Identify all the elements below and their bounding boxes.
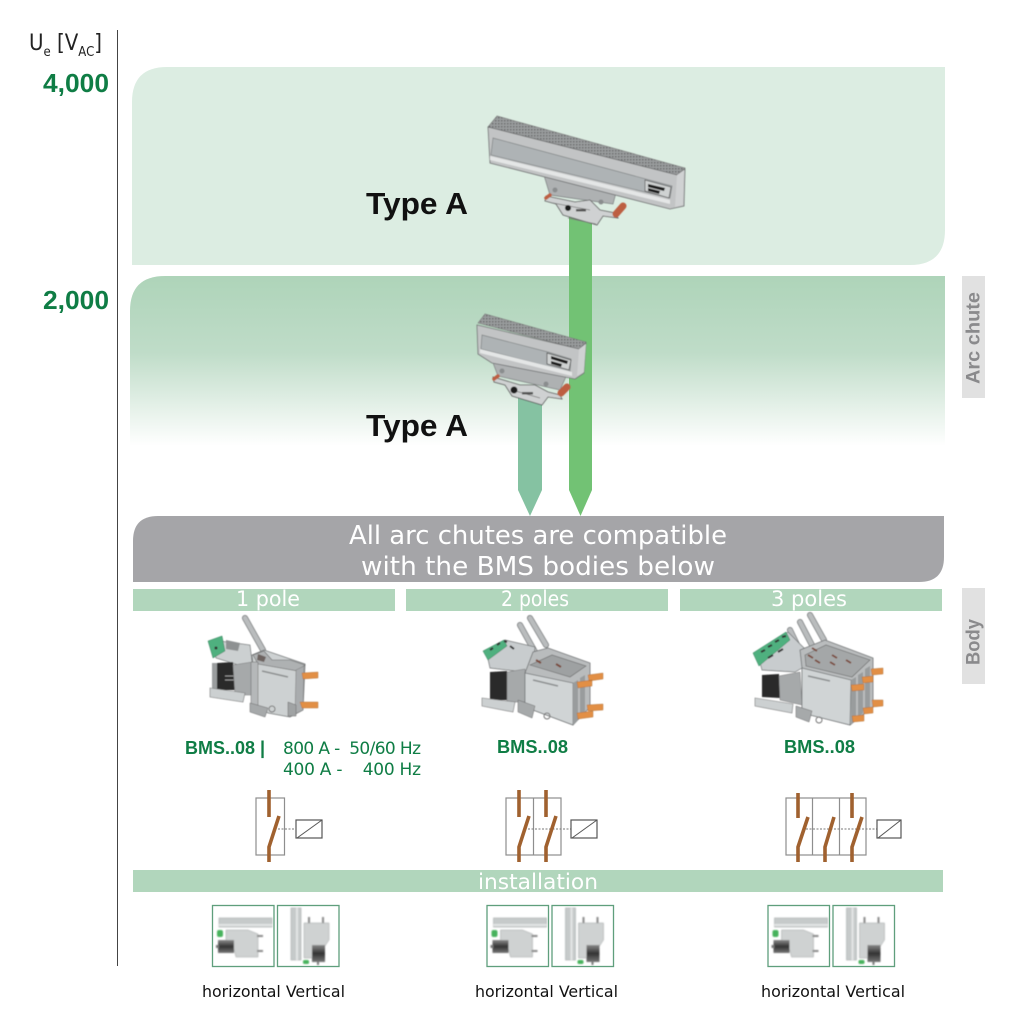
header: installation (133, 870, 943, 894)
label: Type A upper: Type A (366, 186, 468, 221)
arrow: 4000 V type A to bodies (569, 215, 592, 516)
icon: 3 pole BMS body (753, 615, 883, 725)
header: 2 poles: 2 poles (501, 587, 569, 611)
side tab: Body (962, 588, 985, 684)
caption: 3 poles installation: horizontal Vertical (761, 982, 905, 1001)
banner: compatibility note (133, 516, 944, 582)
label: Type A lower: Type A (366, 408, 468, 443)
caption: 1 pole installation: horizontal Vertical (202, 982, 345, 1001)
schematic: 1 pole (256, 790, 322, 862)
header: 3 poles (680, 587, 942, 611)
schematic: 2 poles (506, 790, 597, 862)
icon: small arc chute (477, 314, 586, 405)
panel: 2000 V band (130, 276, 945, 446)
rating text: 800 A: 800 A - 50/60 Hz (283, 739, 421, 759)
installation thumbnails: 2 poles (487, 906, 614, 966)
axis title: ] (94, 31, 102, 56)
header: 2 poles (406, 587, 668, 611)
header: installation: installation (478, 870, 598, 894)
header: 1 pole: 1 pole (236, 587, 300, 611)
header: 1 pole (133, 587, 395, 611)
icon: 2 pole BMS body (482, 618, 603, 725)
panel: 4000 V band (132, 67, 945, 265)
axis title: [V (51, 31, 78, 56)
schematic: 3 poles (786, 793, 901, 862)
axis line (116, 30, 118, 966)
installation thumbnails: 3 poles (768, 906, 894, 966)
axis value: 2,000: 2,000 (43, 285, 109, 315)
axis value: 4,000: 4,000 (43, 68, 109, 98)
model label: 2 poles: BMS..08 (497, 737, 568, 757)
side tab: Body: Body (964, 619, 984, 665)
icon: 1 pole BMS body (208, 618, 318, 717)
axis title: e (44, 45, 51, 60)
banner: compatibility note: All arc chutes are compatible (349, 521, 727, 551)
banner: compatibility note: with the BMS bodies below (361, 552, 715, 582)
icon: large arc chute (488, 116, 685, 225)
installation thumbnails: 1 pole (212, 906, 339, 966)
arrow: 2000 V type A to bodies (518, 395, 542, 516)
header: 3 poles: 3 poles (771, 587, 847, 611)
side tab: Arc chute: Arc chute (964, 292, 984, 384)
axis title: AC (78, 45, 94, 60)
model label: 1 pole: BMS..08 | (185, 738, 265, 758)
side tab: Arc chute (962, 276, 985, 398)
caption: 2 poles installation: horizontal Vertical (475, 982, 618, 1001)
rating text: 400 A: 400 A - 400 Hz (283, 760, 421, 780)
model label: 3 poles: BMS..08 (784, 737, 855, 757)
axis title: U (29, 31, 45, 56)
